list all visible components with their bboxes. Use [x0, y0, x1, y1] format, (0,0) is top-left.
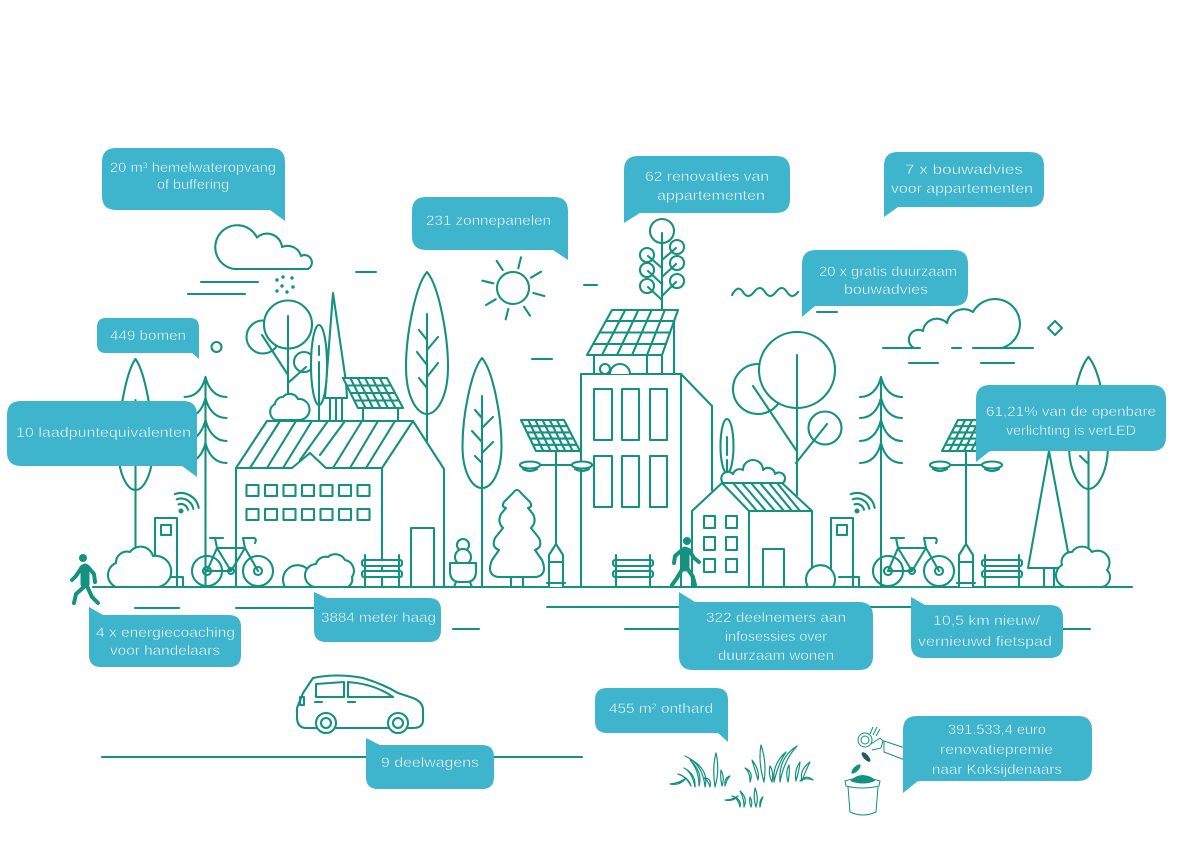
icon: car [297, 676, 423, 733]
callout: LED lighting: 61,21% van de openbare [986, 403, 1156, 419]
bicycle right [873, 538, 954, 586]
callout: renovation premium: naar Koksijdenaars [932, 761, 1062, 777]
callout: rainwater [102, 148, 285, 221]
icon: grass clumps [670, 745, 813, 807]
callout: renovation premium [903, 716, 1092, 793]
callout: cycle path: vernieuwd fietspad [918, 633, 1052, 649]
callout: free building advice: bouwadvies [844, 281, 928, 297]
callout: unpaved area [595, 688, 728, 742]
callout: rainwater: of buffering [157, 176, 229, 192]
tree: cone right [1028, 451, 1071, 587]
road dashes and horizon lines [135, 272, 1090, 629]
bush right [1056, 547, 1110, 587]
callout: rainwater: 20 m³ hemelwateropvang [110, 159, 276, 175]
callout: building advice apartments: voor appartementen [891, 180, 1033, 196]
callout: info sessions [679, 592, 873, 670]
small house [692, 483, 812, 587]
ground line [93, 586, 1132, 588]
callout: renovation premium: 391.533,4 euro [948, 721, 1046, 737]
icon: hand dropping coins into pot [845, 727, 905, 815]
tree: rounded fir [490, 490, 544, 587]
callout: trees [97, 318, 199, 359]
callout: LED lighting: verlichting is verLED [1006, 422, 1136, 438]
person walking centre [672, 537, 699, 585]
street lamp right with solar panel [930, 420, 1002, 587]
tree: tall poplar [406, 272, 448, 441]
road line under car [102, 756, 582, 758]
rooftop solar panel with tree [587, 219, 684, 374]
bench centre [613, 555, 653, 587]
bush near charger [806, 565, 835, 587]
bench left [362, 555, 402, 587]
callout: apartment renovations: 62 renovaties van [645, 168, 769, 184]
callout: solar panels: 231 zonnepanelen [426, 212, 551, 228]
callout: apartment renovations: appartementen [657, 187, 765, 203]
callout: hedge: 3884 meter haag [321, 609, 436, 625]
icon: wave [732, 288, 798, 296]
bicycle left [192, 538, 273, 586]
icon: rain cloud [215, 225, 312, 294]
callout: energy coaching: voor handelaars [110, 642, 220, 658]
callout: info sessions: infosessies over [725, 628, 827, 644]
callout: info sessions: duurzaam wonen [718, 647, 834, 663]
icon: sun [482, 257, 544, 319]
tree: right poplar [1069, 357, 1108, 560]
callout: energy coaching [89, 607, 241, 667]
bench right [982, 555, 1022, 587]
callout: building advice apartments [884, 152, 1044, 217]
icon: right cloud with horizon lines [883, 299, 1033, 363]
callout: info sessions: 322 deelnemers aan [706, 609, 846, 625]
solar panel on annex [343, 378, 403, 421]
bushes in front of house [283, 554, 354, 587]
charging station right [831, 493, 875, 587]
callout: solar panels [412, 197, 568, 260]
callout: hedge [314, 592, 441, 642]
callout: energy coaching: 4 x energiecoaching [96, 624, 235, 640]
callout: shared cars: 9 deelwagens [381, 754, 479, 770]
trees behind house [246, 293, 347, 421]
potted plant [450, 539, 476, 587]
tree: right fir [860, 377, 902, 587]
callout: charging points: 10 laadpuntequivalenten [16, 424, 191, 440]
callout: cycle path: 10,5 km nieuw/ [933, 612, 1040, 628]
tree cluster behind small house [712, 332, 842, 495]
apartment building [581, 374, 712, 587]
callout: building advice apartments: 7 x bouwadvies [905, 161, 1023, 177]
callout: apartment renovations [624, 156, 790, 223]
callout: LED lighting [976, 385, 1166, 462]
callout: cycle path [911, 597, 1063, 658]
street lamp centre with solar panel [520, 420, 592, 587]
callout: unpaved area: 455 m² onthard [609, 700, 713, 716]
callout: free building advice: 20 x gratis duurzaam [819, 263, 957, 279]
tree: central poplar [462, 358, 502, 587]
icon: diamond [1048, 321, 1062, 335]
charging station left [155, 493, 199, 587]
tree: left fir [184, 377, 226, 587]
tree: left poplar [118, 359, 153, 560]
callout: free building advice [802, 250, 968, 317]
bush left [108, 547, 171, 587]
bush on roof [270, 394, 310, 420]
callout: charging points [7, 401, 197, 477]
callout: shared cars [366, 738, 494, 789]
callout: trees: 449 bomen [110, 327, 186, 343]
icon: small circle [212, 342, 222, 352]
large house [236, 421, 444, 587]
person walking left [72, 554, 98, 603]
callout: renovation premium: renovatiepremie [940, 741, 1053, 757]
